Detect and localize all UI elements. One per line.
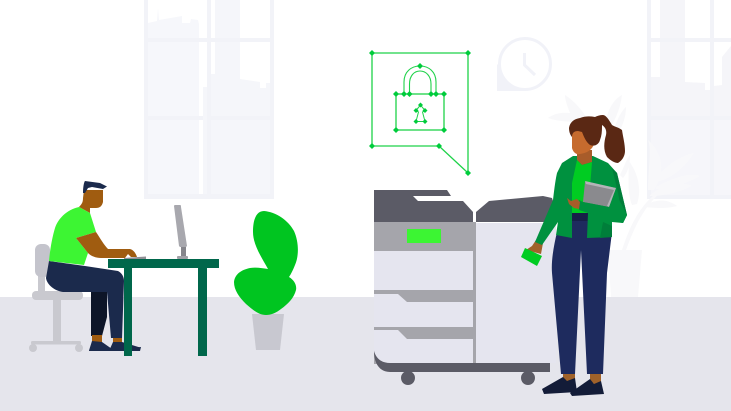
- left window: [144, 0, 274, 199]
- man: green shirt: [49, 207, 96, 265]
- background plant: [548, 95, 700, 297]
- printer: right cabinet: [476, 223, 556, 363]
- man: trousers: [46, 261, 124, 338]
- woman: neck: [577, 150, 592, 165]
- woman: jacket shade: [600, 168, 627, 238]
- woman: hand and green card: [521, 240, 543, 266]
- woman: belt: [572, 213, 588, 221]
- desk: [108, 259, 219, 356]
- woman: hair and ponytail: [569, 115, 625, 163]
- printer: left scanner lid: [374, 190, 473, 222]
- monitor: [174, 205, 188, 259]
- man: arm: [76, 232, 137, 258]
- man: ankles: [92, 335, 122, 344]
- woman: hand on tablet: [567, 198, 580, 209]
- woman: forearm sleeve: [579, 195, 627, 223]
- potted plant: [234, 211, 298, 350]
- security lock wireframe callout: [369, 50, 471, 176]
- woman: trousers: [552, 215, 612, 374]
- man at desk: [46, 181, 141, 351]
- keyhole outline: [414, 102, 428, 124]
- printer: right lid: [476, 196, 560, 222]
- printer: grey chassis: [374, 222, 476, 364]
- printer: base: [374, 351, 550, 372]
- woman: jacket: [535, 156, 627, 245]
- printer: top drawer: [374, 251, 473, 290]
- woman: ankles: [563, 372, 601, 384]
- multifunction printer: [374, 190, 560, 385]
- callout frame: [369, 50, 471, 176]
- man: neck and face: [79, 190, 103, 213]
- keyboard: [124, 256, 146, 259]
- woman with tablet: [521, 115, 627, 396]
- leaves: [234, 211, 298, 315]
- printer: wheels: [401, 371, 535, 385]
- chair: [29, 244, 83, 352]
- printer: bottom drawer: [374, 330, 473, 363]
- woman: face: [572, 130, 594, 154]
- printer: middle drawer: [374, 294, 473, 327]
- right window: [647, 0, 731, 199]
- wall clock: [497, 38, 550, 91]
- woman: shirt: [572, 160, 592, 213]
- padlock outline: [393, 63, 447, 133]
- man: hair: [83, 181, 107, 193]
- woman: tablet: [583, 181, 616, 207]
- floor: [0, 297, 731, 411]
- woman: shoes: [542, 377, 604, 396]
- man: back leg: [91, 290, 107, 336]
- printer: green display: [407, 229, 441, 243]
- man: shoes: [89, 341, 141, 351]
- pot: [252, 314, 284, 350]
